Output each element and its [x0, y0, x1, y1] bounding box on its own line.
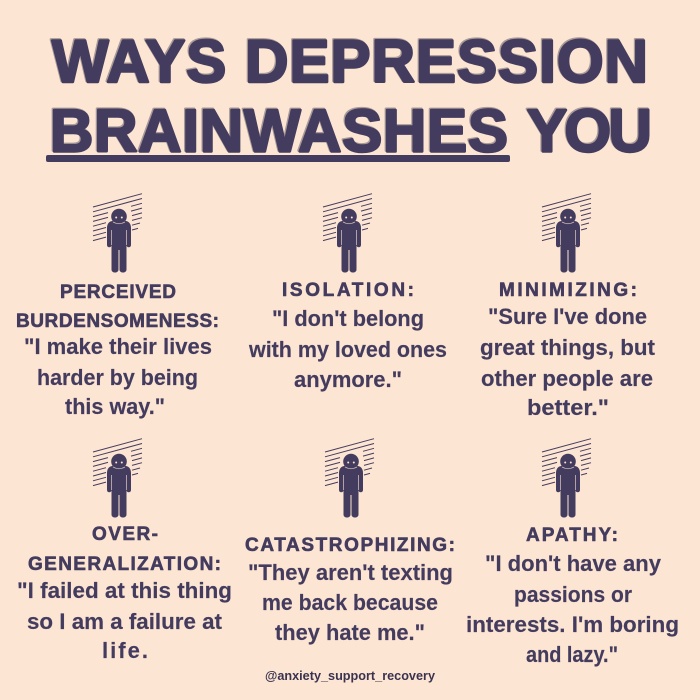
- icon: figure 4: [93, 439, 142, 518]
- text: isolation: with my loved ones: [248, 337, 447, 362]
- icon: figure 3: [542, 194, 591, 272]
- text: over-generalization: OVER-: [92, 524, 158, 545]
- icon: figure 5: [325, 439, 374, 518]
- text: minimizing: "Sure I've done: [488, 304, 647, 329]
- text: isolation: anymore.": [294, 367, 402, 392]
- text: apathy: interests. I'm boring: [466, 612, 679, 637]
- text: minimizing: [480, 280, 656, 420]
- text: over-generalization: GENERALIZATION:: [28, 554, 221, 575]
- title: BRAINWASHES: [50, 98, 508, 164]
- text: apathy: [466, 525, 679, 667]
- title: YOU: [526, 96, 651, 164]
- text: catastrophizing: CATASTROPHIZING:: [245, 535, 455, 556]
- icon: figure 6: [542, 439, 591, 518]
- icon: figure 1: [93, 194, 142, 272]
- text: over-generalization: [17, 524, 232, 663]
- text: minimizing: great things, but: [480, 335, 656, 360]
- text: perceived burdensomeness: "I make their lives: [24, 334, 212, 359]
- text: over-generalization: "I failed at this thing: [17, 578, 232, 603]
- text: apathy: passions or: [514, 582, 632, 607]
- text: apathy: and lazy.": [526, 642, 618, 667]
- text: minimizing: better.": [527, 395, 609, 420]
- title: BRAINWASHES: [49, 96, 507, 164]
- text: apathy: APATHY:: [526, 525, 618, 546]
- text: perceived burdensomeness: this way.": [65, 394, 165, 419]
- text: minimizing: MINIMIZING:: [499, 280, 637, 301]
- text: minimizing: other people are: [481, 366, 653, 391]
- text: perceived burdensomeness: BURDENSOMENESS:: [16, 311, 219, 332]
- text: isolation: [248, 280, 447, 392]
- text: isolation: "I don't belong: [272, 306, 424, 331]
- text: perceived burdensomeness: harder by being: [37, 365, 198, 390]
- text: perceived burdensomeness: PERCEIVED: [60, 282, 176, 303]
- title: WAYS DEPRESSION: [52, 28, 648, 95]
- text: catastrophizing: they hate me.": [275, 620, 425, 645]
- text: catastrophizing: me back because: [262, 590, 438, 615]
- title: YOU: [527, 98, 652, 164]
- text: apathy: "I don't have any: [485, 551, 662, 576]
- title: WAYS DEPRESSION: [51, 27, 647, 94]
- text: isolation: ISOLATION:: [282, 280, 414, 301]
- text: over-generalization: so I am a failure at: [27, 609, 223, 634]
- text: catastrophizing: "They aren't texting: [248, 560, 453, 585]
- credit handle: @anxiety_support_recovery: [265, 669, 435, 683]
- text: catastrophizing: [245, 535, 455, 645]
- icon: figure 2: [323, 194, 372, 272]
- text: over-generalization: life.: [102, 638, 148, 663]
- title: [46, 27, 652, 164]
- text: perceived burdensomeness: [16, 282, 219, 419]
